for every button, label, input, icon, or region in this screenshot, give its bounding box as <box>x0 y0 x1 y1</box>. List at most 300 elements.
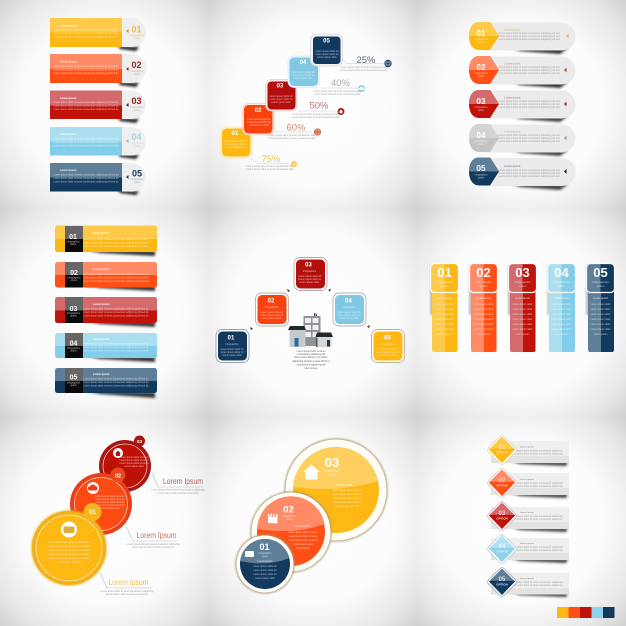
circle 01: Lorem ipsum dolor sit amet consectetur <box>48 557 90 560</box>
column 01: Lorem ipsum <box>437 297 452 300</box>
bar 05: Infographics <box>67 382 81 384</box>
row 04: Lorem ipsum dolor sit amet consectetur adipiscing elit sed do <box>54 141 119 144</box>
step 01 75%: 01 <box>232 131 239 137</box>
card 03: 03 <box>305 262 312 268</box>
label Lorem Ipsum 01: Lorem ipsum dolor sit amet consectetur <box>106 593 148 596</box>
row 04: Infographics <box>130 142 144 145</box>
card 02: Lorem ipsum dolor <box>262 317 282 320</box>
row 05: Lorem ipsum dolor sit amet consectetur adipiscing elit sed do <box>54 174 119 176</box>
card 01: Lorem ipsum dolor sit <box>221 348 244 351</box>
pill 05: Lorem ipsum dolor sit amet consectetur adipiscing elit sed <box>498 169 560 172</box>
circle 03 <box>99 436 203 492</box>
arrow: 02 to 03 <box>287 289 290 292</box>
step 03 50% <box>266 80 344 119</box>
icon: card <box>245 551 254 557</box>
row 05: Lorem ipsum dolor sit amet consectetur adipiscing elit sed do <box>54 180 119 184</box>
row 01: Infographics <box>130 34 144 37</box>
bar 05: 05 <box>70 374 77 382</box>
step 02 60%: Lorem ipsum dolor <box>249 124 269 127</box>
pill 05: 05 <box>477 164 486 173</box>
bar 01: Lorem ipsum dolor sit amet consectetur adipiscing elit sed do <box>84 245 149 248</box>
column 04: Lorem ipsum dolor <box>552 328 572 331</box>
circle 02: 02 <box>115 474 121 480</box>
bar 02: Lorem ipsum dolor sit amet consectetur adipiscing elit sed do <box>84 273 149 276</box>
column 05: Infographics <box>592 280 609 284</box>
card 03: Lorem ipsum dolor sit <box>298 278 321 281</box>
pill 03: Lorem ipsum dolor sit amet consectetur adipiscing elit sed <box>498 106 560 109</box>
panel: ribbon list with round tabs <box>50 18 146 195</box>
step 01 75%: Lorem ipsum dolor sit amet consectetur adip <box>246 165 294 168</box>
bar 02: Lorem ipsum dolor sit amet consectetur adipiscing elit sed do <box>84 280 149 283</box>
row 04: Lorem ipsum <box>60 132 77 136</box>
column 04: Infographics <box>553 280 570 284</box>
pill 03: Lorem ipsum dolor sit amet consectetur adipiscing elit sed <box>498 103 560 106</box>
column 01: 01 <box>437 265 452 280</box>
pill 04: Infographics <box>474 140 488 143</box>
row 02: Lorem ipsum <box>60 60 77 64</box>
card 03: Lorem ipsum dolor <box>300 281 320 284</box>
badge row 02: Lorem ipsum dolor sit amet consectetur adipiscing <box>509 485 563 488</box>
card 04: Lorem ipsum dolor <box>339 317 359 320</box>
badge row 05: Lorem ipsum dolor sit amet consectetur adipiscing <box>509 584 563 587</box>
row 01: Lorem ipsum dolor sit amet consectetur adipiscing elit sed do <box>54 36 119 38</box>
bar 03: Lorem ipsum dolor sit amet consectetur adipiscing elit sed do <box>84 311 149 314</box>
circle 01: option <box>262 555 269 558</box>
badge row 04: Lorem ipsum <box>520 543 534 545</box>
column 02: Lorem ipsum dolor <box>474 323 494 326</box>
column 02: 02 <box>476 265 491 280</box>
step 03 50%: Lorem ipsum dolor sit amet consectetur adip <box>292 116 340 119</box>
pill 04: Lorem ipsum dolor sit amet consectetur adipiscing elit sed <box>498 134 560 137</box>
badge row 02: OPTION <box>496 484 508 488</box>
label Lorem Ipsum 02: Lorem ipsum dolor sit amet consectetur adipiscing <box>126 543 180 546</box>
circle 01: Lorem ipsum dolor sit amet consectetur <box>48 549 90 552</box>
column 05 <box>586 264 614 352</box>
column 04: Lorem ipsum <box>555 333 568 336</box>
circle 01: 01 <box>259 542 270 552</box>
panel: bars with dark number tab <box>55 226 157 398</box>
card 01: Lorem ipsum dolor <box>222 354 242 357</box>
bar 05 <box>55 368 157 398</box>
column 01: Infographics <box>436 280 453 284</box>
circle 02: Lorem ipsum dolor <box>293 543 313 546</box>
pill 02: Infographics <box>474 72 488 75</box>
row 02: Lorem ipsum dolor sit amet consectetur adipiscing elit sed do <box>54 65 119 68</box>
icon: buildings <box>288 313 333 347</box>
card 03: Lorem ipsum dolor sit <box>298 275 321 278</box>
row 01: Lorem ipsum <box>60 24 77 28</box>
circle 02: Lorem ipsum <box>294 525 310 528</box>
pill 05: Infographics <box>474 174 488 176</box>
pill 02: Lorem ipsum dolor sit amet consectetur adipiscing elit sed <box>498 72 560 75</box>
row 03: Lorem ipsum dolor sit amet consectetur adipiscing elit sed do <box>54 104 119 108</box>
card 03 <box>294 258 327 290</box>
label Lorem Ipsum 03 <box>151 476 205 495</box>
circle 02 <box>70 468 177 541</box>
label Lorem Ipsum 03: Lorem Ipsum <box>163 476 203 486</box>
row 03: 03 <box>131 96 142 106</box>
circle 01 <box>236 534 294 594</box>
column 05: Lorem ipsum <box>593 297 608 300</box>
step 02 60%: Lorem ipsum dolor sit amet consectetur adip <box>268 137 316 140</box>
card 04: 04 <box>345 298 352 304</box>
bar 05: Lorem ipsum <box>93 372 110 376</box>
circle 01: Infographics <box>258 552 272 555</box>
row 03: Lorem ipsum <box>60 96 77 100</box>
circle 01: Lorem ipsum dolor sit <box>254 573 277 576</box>
column 04: Lorem ipsum dolor <box>552 323 572 326</box>
row 01: Lorem ipsum dolor sit amet consectetur adipiscing elit sed do <box>54 28 119 32</box>
circle 03: Lorem ipsum dolor sit <box>336 505 359 508</box>
column 03: Lorem ipsum dolor <box>513 318 533 321</box>
bar 04: Lorem ipsum dolor sit amet consectetur adipiscing elit sed do <box>84 342 149 346</box>
bar 03: 03 <box>70 306 77 313</box>
step 05 25%: Lorem ipsum dolor sit amet consectetur adip <box>340 69 388 72</box>
pill 01: Lorem ipsum dolor sit amet consectetur adipiscing elit sed <box>498 32 560 35</box>
circle 01: Lorem ipsum dolor sit <box>254 565 277 568</box>
pill 04: Lorem ipsum dolor sit amet consectetur adipiscing elit sed <box>498 140 560 143</box>
step 01 75%: 75% <box>261 154 281 165</box>
bar 05: option <box>70 384 77 387</box>
column 01: Lorem ipsum <box>438 333 451 336</box>
step 04 40%: 40% <box>331 78 351 89</box>
bar 01 <box>55 226 157 256</box>
column 03: Lorem ipsum <box>515 297 530 300</box>
column 05: 05 <box>593 265 608 280</box>
circle 02: Lorem ipsum dolor sit amet <box>96 501 125 504</box>
badge row 01: 01 <box>499 445 506 451</box>
circle 03: option <box>328 472 336 476</box>
step 02 60%: Lorem ipsum dolor sit <box>248 118 271 121</box>
circle 01: Lorem ipsum dolor sit <box>58 561 81 564</box>
arrow: 01 to 02 <box>250 327 253 330</box>
pill 01: Lorem ipsum <box>504 28 521 32</box>
bar 04 <box>55 333 157 362</box>
circle 02 <box>250 492 332 572</box>
pill 05: Lorem ipsum <box>504 164 521 168</box>
bar 03: Lorem ipsum <box>93 302 110 306</box>
pill 03: Infographics <box>474 106 488 109</box>
pill 02: Lorem ipsum <box>504 62 521 66</box>
bar 03: Lorem ipsum dolor sit amet consectetur adipiscing elit sed do <box>84 314 149 318</box>
panel: diamond badges list <box>486 434 614 618</box>
label Lorem Ipsum 02: Lorem ipsum dolor sit amet consectetur <box>132 546 174 549</box>
badge row 04: OPTION <box>496 550 508 554</box>
card 05: Lorem ipsum dolor sit <box>377 348 400 351</box>
row 02: option <box>134 73 141 76</box>
column 02: Infographics <box>475 280 492 284</box>
step 02 60%: Lorem ipsum dolor sit amet consectetur adip <box>268 134 316 137</box>
label Lorem Ipsum 01: Lorem ipsum dolor sit amet consectetur adipiscing <box>100 590 154 593</box>
badge row 03: 03 <box>499 511 506 517</box>
card 02: Lorem ipsum dolor sit <box>260 311 283 314</box>
row 04 <box>50 127 146 159</box>
column 03: Lorem ipsum <box>516 333 529 336</box>
pill 04: option <box>478 143 485 146</box>
column 03: Lorem ipsum dolor <box>513 303 533 306</box>
circle 03: Lorem ipsum <box>336 484 352 486</box>
row 02: Lorem ipsum dolor sit amet consectetur adipiscing elit sed do <box>54 68 119 72</box>
circle 02: Lorem ipsum dolor sit amet <box>96 498 125 501</box>
step 05 25% <box>310 34 392 72</box>
row 04: option <box>134 145 141 148</box>
pill 01: Lorem ipsum dolor sit amet consectetur adipiscing elit sed <box>498 38 560 41</box>
bar 05: Lorem ipsum dolor sit amet consectetur adipiscing elit sed do <box>84 378 149 380</box>
circle 03: Lorem ipsum dolor <box>124 465 144 468</box>
badge row 04: 04 <box>499 544 506 550</box>
card 04: Lorem ipsum dolor sit <box>338 311 361 314</box>
circle 02: 02 <box>283 504 294 516</box>
column 03: Lorem ipsum dolor <box>513 313 533 316</box>
circle 03: Lorem ipsum dolor sit amet <box>333 489 362 492</box>
column 05: option <box>596 284 605 288</box>
badge row 02: Lorem ipsum <box>520 479 534 481</box>
pill 02 <box>469 56 576 88</box>
circle 01: Lorem ipsum dolor sit amet consectetur <box>48 541 90 544</box>
bar 01: Lorem ipsum dolor sit amet consectetur adipiscing elit sed do <box>84 242 149 244</box>
circle 03 <box>284 438 388 542</box>
row 01: 01 <box>131 24 142 34</box>
step 05 25%: Lorem ipsum dolor sit amet consectetur adip <box>340 66 388 69</box>
label Lorem Ipsum 02: Lorem Ipsum <box>136 530 176 540</box>
column 05: Lorem ipsum dolor <box>591 318 611 321</box>
circle 03: Lorem ipsum dolor sit amet <box>120 462 149 465</box>
badge row 01: Lorem ipsum <box>520 446 534 448</box>
step 03 50%: Lorem ipsum dolor sit amet consectetur adip <box>292 113 340 116</box>
column 02: Lorem ipsum <box>477 333 490 336</box>
bar 05: Lorem ipsum dolor sit amet consectetur adipiscing elit sed do <box>84 381 149 384</box>
column 02: Lorem ipsum dolor <box>474 328 494 331</box>
row 02 <box>50 54 146 87</box>
bar 03: Infographics <box>67 312 81 315</box>
badge row 04: Lorem ipsum dolor sit amet consectetur adipiscing <box>509 549 563 552</box>
step 04 40%: Lorem ipsum dolor sit amet consectetur adip <box>313 93 361 96</box>
circle 01 <box>32 503 152 588</box>
badge row 05: OPTION <box>496 582 508 586</box>
row 05: 05 <box>132 168 142 178</box>
badge row 03: Lorem ipsum dolor sit amet consectetur adipiscing <box>509 515 563 518</box>
text block below building: consectetuer adipiscing elit <box>297 364 326 366</box>
pill 05: Lorem ipsum dolor sit amet consectetur adipiscing elit sed <box>498 172 560 175</box>
circle 02: Lorem ipsum dolor sit amet <box>96 504 125 507</box>
row 01: option <box>134 37 141 40</box>
card 04: Infographics <box>342 306 356 309</box>
circle 02: Lorem ipsum dolor sit amet <box>289 531 318 534</box>
icon: cloud <box>358 85 365 92</box>
row 01: Lorem ipsum dolor sit amet consectetur adipiscing elit sed do <box>54 32 119 35</box>
pill 01 <box>469 22 576 54</box>
bar 04: Infographics <box>67 347 81 350</box>
pill 02: 02 <box>477 63 486 72</box>
text block below building: consectetuer adipiscing elit <box>297 353 326 356</box>
column 02 <box>469 264 498 352</box>
row 02: 02 <box>131 60 142 70</box>
icon: factory <box>268 514 278 524</box>
badge row 03: Lorem ipsum dolor sit amet consectetur adipiscing <box>509 518 563 521</box>
card 04 <box>333 293 366 326</box>
column 02: Lorem ipsum dolor <box>474 303 494 306</box>
pill 04: 04 <box>477 131 486 140</box>
column 04: Lorem ipsum dolor <box>552 313 572 316</box>
label Lorem Ipsum 01 <box>100 577 154 596</box>
bar 02: option <box>71 279 78 282</box>
icon: document <box>314 128 321 136</box>
badge row 05: Lorem ipsum dolor sit amet consectetur adipiscing <box>509 581 563 584</box>
circle 03: Infographics <box>324 468 341 472</box>
row 03: option <box>134 109 141 112</box>
pill 02: Lorem ipsum dolor sit amet consectetur adipiscing elit sed <box>498 69 560 72</box>
column 01: Lorem ipsum dolor <box>435 318 455 321</box>
pill 01: Lorem ipsum dolor sit amet consectetur adipiscing elit sed <box>498 35 560 38</box>
column 03: Lorem ipsum dolor <box>513 323 533 326</box>
step 04 40%: Lorem ipsum dolor sit <box>292 71 315 74</box>
row 05: Infographics <box>130 178 144 181</box>
badge row 03: OPTION <box>496 516 508 520</box>
text block below building: Lorem ipsum dolor sit amet <box>297 350 326 353</box>
row 03 <box>50 90 146 123</box>
circle 03: 03 <box>137 439 142 444</box>
step 04 40%: 04 <box>300 60 307 66</box>
card 05 <box>372 330 404 362</box>
step 03 50%: Lorem ipsum dolor sit <box>270 98 293 101</box>
label Lorem Ipsum 03: Lorem ipsum dolor sit amet consectetur adipiscing <box>151 488 205 492</box>
badge row 05: 05 <box>499 577 506 583</box>
circle 01: Lorem ipsum dolor sit amet consectetur <box>48 545 90 548</box>
row 02: Infographics <box>130 70 144 73</box>
pill 04 <box>469 124 576 156</box>
column 05: Lorem ipsum dolor <box>591 308 611 311</box>
card 01: Lorem ipsum dolor sit <box>221 351 244 354</box>
panel: pyramid of squares around building <box>216 258 404 370</box>
bar 02: Lorem ipsum dolor sit amet consectetur adipiscing elit sed do <box>84 276 149 280</box>
column 02: Lorem ipsum dolor <box>474 318 494 321</box>
column 05: Lorem ipsum <box>594 333 607 336</box>
pill 05: option <box>478 176 485 180</box>
step 04 40% <box>288 56 365 96</box>
circle 03: Lorem ipsum dolor sit amet <box>333 493 362 496</box>
step 02 60%: 60% <box>286 122 306 134</box>
column 01: Lorem ipsum dolor <box>435 313 455 316</box>
bar 04: Lorem ipsum dolor sit amet consectetur adipiscing elit sed do <box>84 346 149 349</box>
icon: card <box>384 60 392 67</box>
row 05: option <box>134 181 141 184</box>
column 02: option <box>479 284 488 288</box>
row 05: Lorem ipsum <box>60 168 77 172</box>
column 04: Lorem ipsum dolor <box>552 308 572 311</box>
pill 03: option <box>478 109 485 112</box>
circle 03: Lorem ipsum dolor sit amet <box>333 497 362 500</box>
circle 02: Lorem ipsum dolor <box>100 507 120 510</box>
column 01: Lorem ipsum dolor <box>435 328 455 331</box>
text block below building: Nam cursus Morbi ut mi nullam <box>295 356 327 359</box>
icon: coin <box>291 161 297 167</box>
card 02 <box>256 293 288 326</box>
column 01 <box>430 264 458 352</box>
column 03 <box>508 264 536 352</box>
column 03: Lorem ipsum dolor <box>513 328 533 331</box>
circle 01: 01 <box>89 510 96 516</box>
pill 01: Infographics <box>474 38 488 41</box>
pill 03 <box>469 90 576 122</box>
circle 02: Lorem ipsum dolor sit amet <box>289 539 318 542</box>
step 01 75%: Lorem ipsum dolor sit <box>225 143 248 146</box>
card 04: Lorem ipsum dolor sit <box>338 314 361 317</box>
badge row 02 <box>486 467 569 499</box>
circle 02: Lorem ipsum <box>296 547 310 550</box>
column 02: Lorem ipsum <box>476 297 491 300</box>
arrow: 03 to 04 <box>328 288 331 292</box>
circle 02: option <box>286 518 293 521</box>
column 01: option <box>440 284 449 288</box>
card 05: Lorem ipsum dolor <box>378 354 398 357</box>
bar 01: Lorem ipsum dolor sit amet consectetur adipiscing elit sed do <box>84 238 149 241</box>
row 05 <box>50 163 146 195</box>
card 01 <box>216 330 249 362</box>
pill 04: Lorem ipsum <box>504 130 521 134</box>
bar 01: Infographics <box>66 240 80 244</box>
panel: nested circles with rim <box>236 438 388 594</box>
step 05 25%: Lorem ipsum dolor <box>317 56 337 59</box>
arrow: 04 to 05 <box>367 325 370 328</box>
card 01: Infographics <box>225 343 239 346</box>
step 04 40%: Lorem ipsum dolor sit <box>292 74 315 77</box>
step 04 40%: Lorem ipsum dolor sit amet consectetur adip <box>313 90 361 93</box>
row 05: Lorem ipsum dolor sit amet consectetur adipiscing elit sed do <box>54 177 119 180</box>
circle 02: Lorem ipsum dolor sit amet <box>96 495 125 498</box>
pill 05 <box>469 158 576 190</box>
column 04: Lorem ipsum dolor <box>552 318 572 321</box>
pill 05: Lorem ipsum dolor sit amet consectetur adipiscing elit sed <box>498 175 560 178</box>
card 05: Infographics <box>381 343 395 346</box>
badge row 05: Lorem ipsum <box>520 578 534 580</box>
panel: vertical columns <box>430 264 614 352</box>
row 03: Lorem ipsum dolor sit amet consectetur adipiscing elit sed do <box>54 108 119 111</box>
pill 03: Lorem ipsum <box>504 96 521 100</box>
card 05: Lorem ipsum dolor sit <box>377 351 400 354</box>
pill 03: 03 <box>477 97 486 106</box>
row 02: Lorem ipsum dolor sit amet consectetur adipiscing elit sed do <box>54 72 119 75</box>
badge row 01: Lorem ipsum dolor sit amet consectetur adipiscing <box>509 452 563 456</box>
circle 03: Lorem ipsum dolor sit amet <box>333 501 362 504</box>
badge row 01: Lorem ipsum dolor sit amet consectetur adipiscing <box>509 450 563 452</box>
bar 01: Lorem ipsum <box>92 231 109 235</box>
column 04: option <box>557 284 566 288</box>
row 03: Lorem ipsum dolor sit amet consectetur adipiscing elit sed do <box>54 101 119 104</box>
column 05: Lorem ipsum dolor <box>591 323 611 326</box>
pill 02: Lorem ipsum dolor sit amet consectetur adipiscing elit sed <box>498 66 560 69</box>
panel: hexagon pills <box>469 22 576 190</box>
column 04: Lorem ipsum <box>554 297 569 300</box>
badge row 01: OPTION <box>496 450 508 454</box>
circle 01: Lorem ipsum dolor sit amet consectetur <box>48 553 90 556</box>
column 05: Lorem ipsum dolor <box>591 313 611 316</box>
badge row 02: Lorem ipsum dolor sit amet consectetur adipiscing <box>509 482 563 485</box>
badge row 03: Lorem ipsum <box>520 512 534 514</box>
text block below building: adipiscing elit Nam cursus Morbi ut <box>292 360 330 363</box>
circle 02: Infographics <box>282 515 296 518</box>
column 04: Lorem ipsum dolor <box>552 303 572 306</box>
pill 03: Lorem ipsum dolor sit amet consectetur adipiscing elit sed <box>498 100 560 103</box>
column 05: Lorem ipsum dolor <box>591 328 611 331</box>
bar 03: option <box>70 314 77 318</box>
bar 02: Infographics <box>67 276 81 280</box>
label Lorem Ipsum 01: Lorem Ipsum <box>108 577 148 587</box>
icon: house <box>338 108 344 115</box>
step 05 25%: Lorem ipsum dolor sit <box>316 53 339 56</box>
text block below building <box>292 350 330 370</box>
panel: staircase percentages <box>220 34 392 171</box>
column 03: Infographics <box>514 280 531 284</box>
